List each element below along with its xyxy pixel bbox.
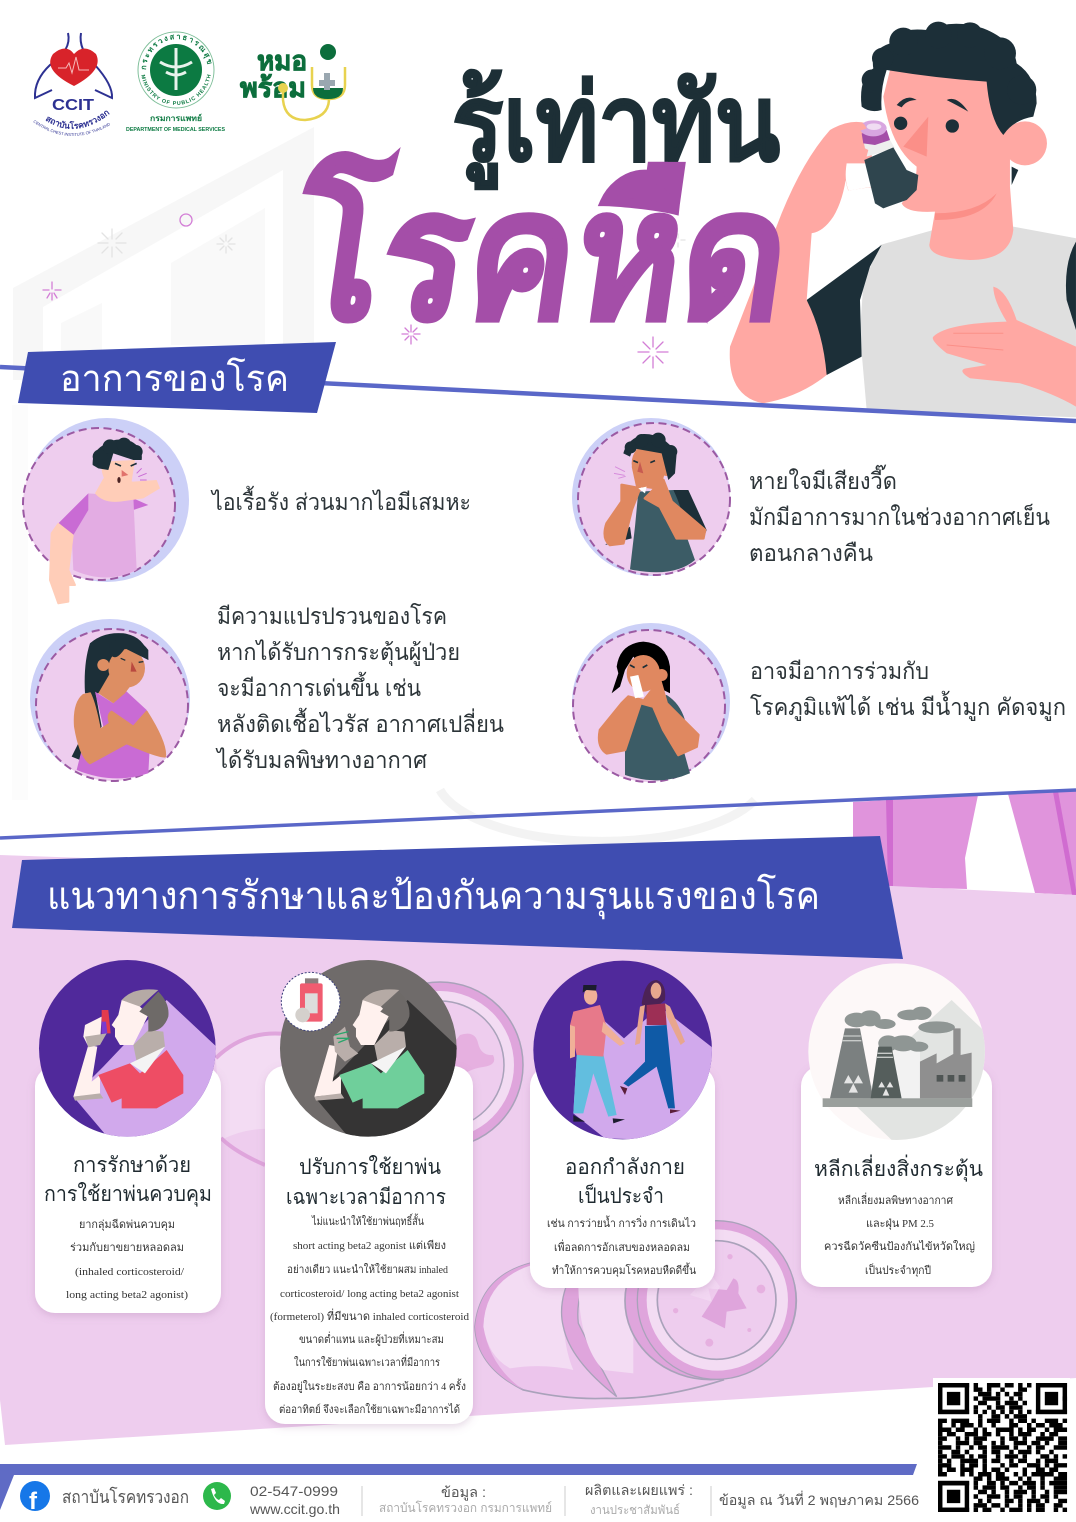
heading: เฉพาะเวลามีอาการ	[286, 1186, 446, 1209]
divider line: symptoms	[0, 367, 1076, 421]
text block: ทำให้การควบคุมโรคหอบหืดดีขึ้น	[552, 1262, 696, 1277]
card 2: reliever inhaler	[265, 960, 473, 1424]
curtains	[853, 789, 1076, 896]
symptom 2: wheezing	[572, 418, 1050, 576]
decoration: cell and airway lower	[475, 1221, 796, 1399]
logo: CCIT: CCIT	[52, 97, 94, 114]
logo: mor prom: หมอ	[257, 46, 307, 76]
heading	[565, 1156, 685, 1208]
logo: mor prom: พร้อม	[240, 73, 306, 103]
footer credits: สถาบันโรคทรวงอก กรมการแพทย์	[379, 1500, 552, 1515]
heading: ปรับการใช้ยาพ่น	[299, 1155, 441, 1179]
text block: short acting beta2 agonist แต่เพียง	[293, 1239, 446, 1252]
icon: man using inhaler	[39, 960, 220, 1140]
text block	[66, 1218, 188, 1301]
text block: ร่วมกับยาขยายหลอดลม	[70, 1242, 184, 1254]
background: faint building	[12, 127, 755, 841]
logo: ministry of public health	[126, 32, 225, 133]
text block: (formeterol) ที่มีขนาด inhaled corticosteroid	[270, 1308, 469, 1323]
text block	[547, 1215, 696, 1277]
text block: อาจมีอาการร่วมกับ	[750, 658, 929, 684]
text block: ไม่แนะนำให้ใช้ยาพ่นฤทธิ์สั้น	[311, 1213, 424, 1228]
text block: เพื่อลดการอักเสบของหลอดลม	[554, 1239, 690, 1254]
heading: การใช้ยาพ่นควบคุม	[44, 1182, 212, 1207]
text block: มีความแปรปรวนของโรค	[217, 603, 447, 629]
text block: ได้รับมลพิษทางอากาศ	[215, 747, 427, 773]
logo: ministry of public health: MINISTRY OF PUBLIC HEALTH	[141, 74, 211, 105]
icon: wheezing person	[572, 418, 730, 576]
text block: จะมีอาการเด่นขึ้น เช่น	[217, 672, 421, 701]
heading	[44, 1154, 212, 1207]
card 4: avoid triggers	[801, 963, 992, 1287]
text block: เป็นประจำทุกปี	[865, 1263, 931, 1277]
text block: long acting beta2 agonist)	[66, 1289, 188, 1301]
text block	[750, 658, 1066, 721]
banner: symptoms heading	[18, 342, 336, 413]
text block: ต่ออาทิตย์ จึงจะเลือกใช้ยาเฉพาะมีอาการได้	[279, 1403, 460, 1416]
footer credits: งานประชาสัมพันธ์	[590, 1503, 680, 1517]
symptom 3: variable disease	[30, 603, 504, 781]
pink treatment panel	[0, 855, 1076, 1445]
heading: เป็นประจำ	[578, 1182, 664, 1208]
text block: เช่น การว่ายน้ำ การวิ่ง การเดินไว	[547, 1215, 696, 1230]
text block: มักมีอาการมากในช่วงอากาศเย็น	[749, 502, 1050, 530]
logo: CCIT: สถาบันโรคทรวงอก	[46, 110, 110, 130]
text block	[270, 1213, 469, 1416]
disease name heading: โรคหืด	[281, 151, 802, 357]
symptom 1: chronic cough	[23, 418, 471, 603]
icon: coughing person	[23, 418, 189, 603]
QR code	[933, 1378, 1070, 1515]
text block: หลังติดเชื้อไวรัส อากาศเปลี่ยน	[217, 708, 504, 737]
text block: corticosteroid/ long acting beta2 agonist	[280, 1288, 459, 1300]
text block: ควรฉีดวัคซีนป้องกันไข้หวัดใหญ่	[824, 1240, 975, 1253]
text block	[749, 464, 1050, 566]
footer credits	[362, 1482, 919, 1517]
text block: อย่างเดียว แนะนำให้ใช้ยาผสม inhaled	[287, 1263, 448, 1276]
heading: การรักษาด้วย	[73, 1154, 191, 1177]
text block: (inhaled corticosteroid/	[75, 1266, 185, 1278]
text block: โรคภูมิแพ้ได้ เช่น มีน้ำมูก คัดจมูก	[750, 691, 1066, 721]
symptom 4: allergy	[572, 623, 1066, 782]
icon: facebook	[20, 1481, 50, 1515]
text block: หายใจมีเสียงวี๊ด	[749, 464, 897, 494]
banner: treatment heading: แนวทางการรักษาและป้องกันความรุนแรงของโรค	[47, 874, 820, 920]
banner: treatment heading	[12, 836, 903, 959]
logo: CCIT: CENTRAL CHEST INSTITUTE OF THAILAND	[34, 120, 110, 136]
logo: mor prom	[240, 44, 345, 120]
main illustration: man using inhaler	[730, 22, 1076, 417]
logo: ministry of public health: DEPARTMENT OF MEDICAL SERVICES	[126, 127, 225, 133]
text block: ขนาดต่ำแทน และผู้ป่วยที่เหมาะสม	[299, 1331, 444, 1346]
footer contact info: สถาบันโรคทรวงอก	[62, 1486, 189, 1507]
footer credits: ผลิตและเผยแพร่ :	[585, 1482, 693, 1498]
card 1: controller inhaler	[35, 960, 221, 1313]
footer contact info	[20, 1481, 340, 1517]
logo: CCIT	[34, 32, 113, 136]
icon: woman with crossed arms	[30, 619, 190, 781]
logo: ministry of public health: กรมการแพทย์	[150, 113, 202, 123]
card 3: exercise	[530, 961, 715, 1288]
text block: ตอนกลางคืน	[749, 540, 873, 566]
text block: และฝุ่น PM 2.5	[866, 1218, 934, 1230]
icon: factory pollution	[808, 963, 987, 1140]
decoration: cell and airway upper	[216, 982, 523, 1165]
title: รู้เท่าทัน	[452, 64, 780, 190]
footer credits: ข้อมูล ณ วันที่ 2 พฤษภาคม 2566	[719, 1491, 919, 1509]
text block: หลีกเลี่ยงมลพิษทางอากาศ	[838, 1192, 953, 1207]
heading	[286, 1155, 446, 1209]
icon: man using inhaler, grey	[280, 960, 461, 1140]
icon: phone	[203, 1482, 231, 1510]
heading: ออกกำลังกาย	[565, 1156, 685, 1179]
footer contact info: 02-547-0999	[250, 1483, 338, 1499]
icon: facebook: f	[29, 1488, 38, 1515]
text block: ในการใช้ยาพ่นเฉพาะเวลาที่มีอาการ	[294, 1354, 440, 1369]
icon: couple walking	[533, 961, 713, 1142]
text block: ยากลุ่มฉีดพ่นควบคุม	[79, 1218, 175, 1231]
logo: ministry of public health: กระทรวงสาธารณสุข	[142, 34, 212, 70]
text block: ต้องอยู่ในระยะสงบ คือ อาการน้อยกว่า 4 ครั้ง	[273, 1378, 466, 1393]
banner: symptoms heading: อาการของโรค	[60, 357, 289, 399]
text block	[824, 1192, 975, 1277]
text block	[215, 603, 504, 773]
text block: ไอเรื้อรัง ส่วนมากไอมีเสมหะ	[210, 486, 471, 515]
sparkles	[43, 214, 685, 368]
footer contact info: www.ccit.go.th	[249, 1501, 340, 1517]
divider line: treatment	[0, 790, 1076, 838]
text block: หากได้รับการกระตุ้นผู้ป่วย	[217, 639, 460, 666]
icon: person with tissue	[572, 623, 730, 782]
footer credits: ข้อมูล :	[441, 1484, 486, 1501]
icon: medicine bottle	[281, 972, 340, 1031]
footer bar	[0, 1464, 917, 1510]
heading: หลีกเลี่ยงสิ่งกระตุ้น	[814, 1154, 983, 1182]
